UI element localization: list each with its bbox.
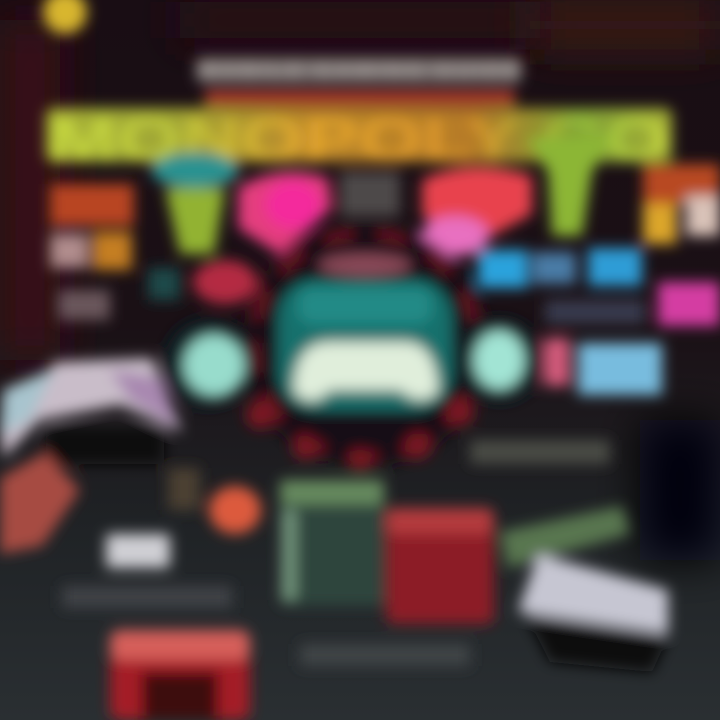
icon: white console [518,554,668,672]
panel: lower left device [0,358,182,464]
panel: right column tiles [478,164,720,395]
red ring dots [246,398,474,471]
panel: right text and green card [470,440,630,568]
icon: red and green board [0,452,80,554]
caption left [62,586,232,608]
subtitle: MOBILE GAMING GUIDE [199,58,519,83]
icon: yellow lamp [43,0,87,34]
icon: left small wheel [164,319,252,407]
caption bottom [300,644,470,666]
icon: orange token [168,468,261,534]
title: MONOPOLY GO [49,106,669,173]
title [46,90,672,173]
icon: main game controller wheel [243,223,487,467]
panel: top game tiles [151,134,614,256]
icon: right small wheel [458,318,542,402]
panel: left column tiles [50,184,257,320]
icon: green box [280,480,384,606]
icon: bottom red box [110,630,250,720]
icon: red box [386,508,494,624]
icon: white card [106,534,170,568]
